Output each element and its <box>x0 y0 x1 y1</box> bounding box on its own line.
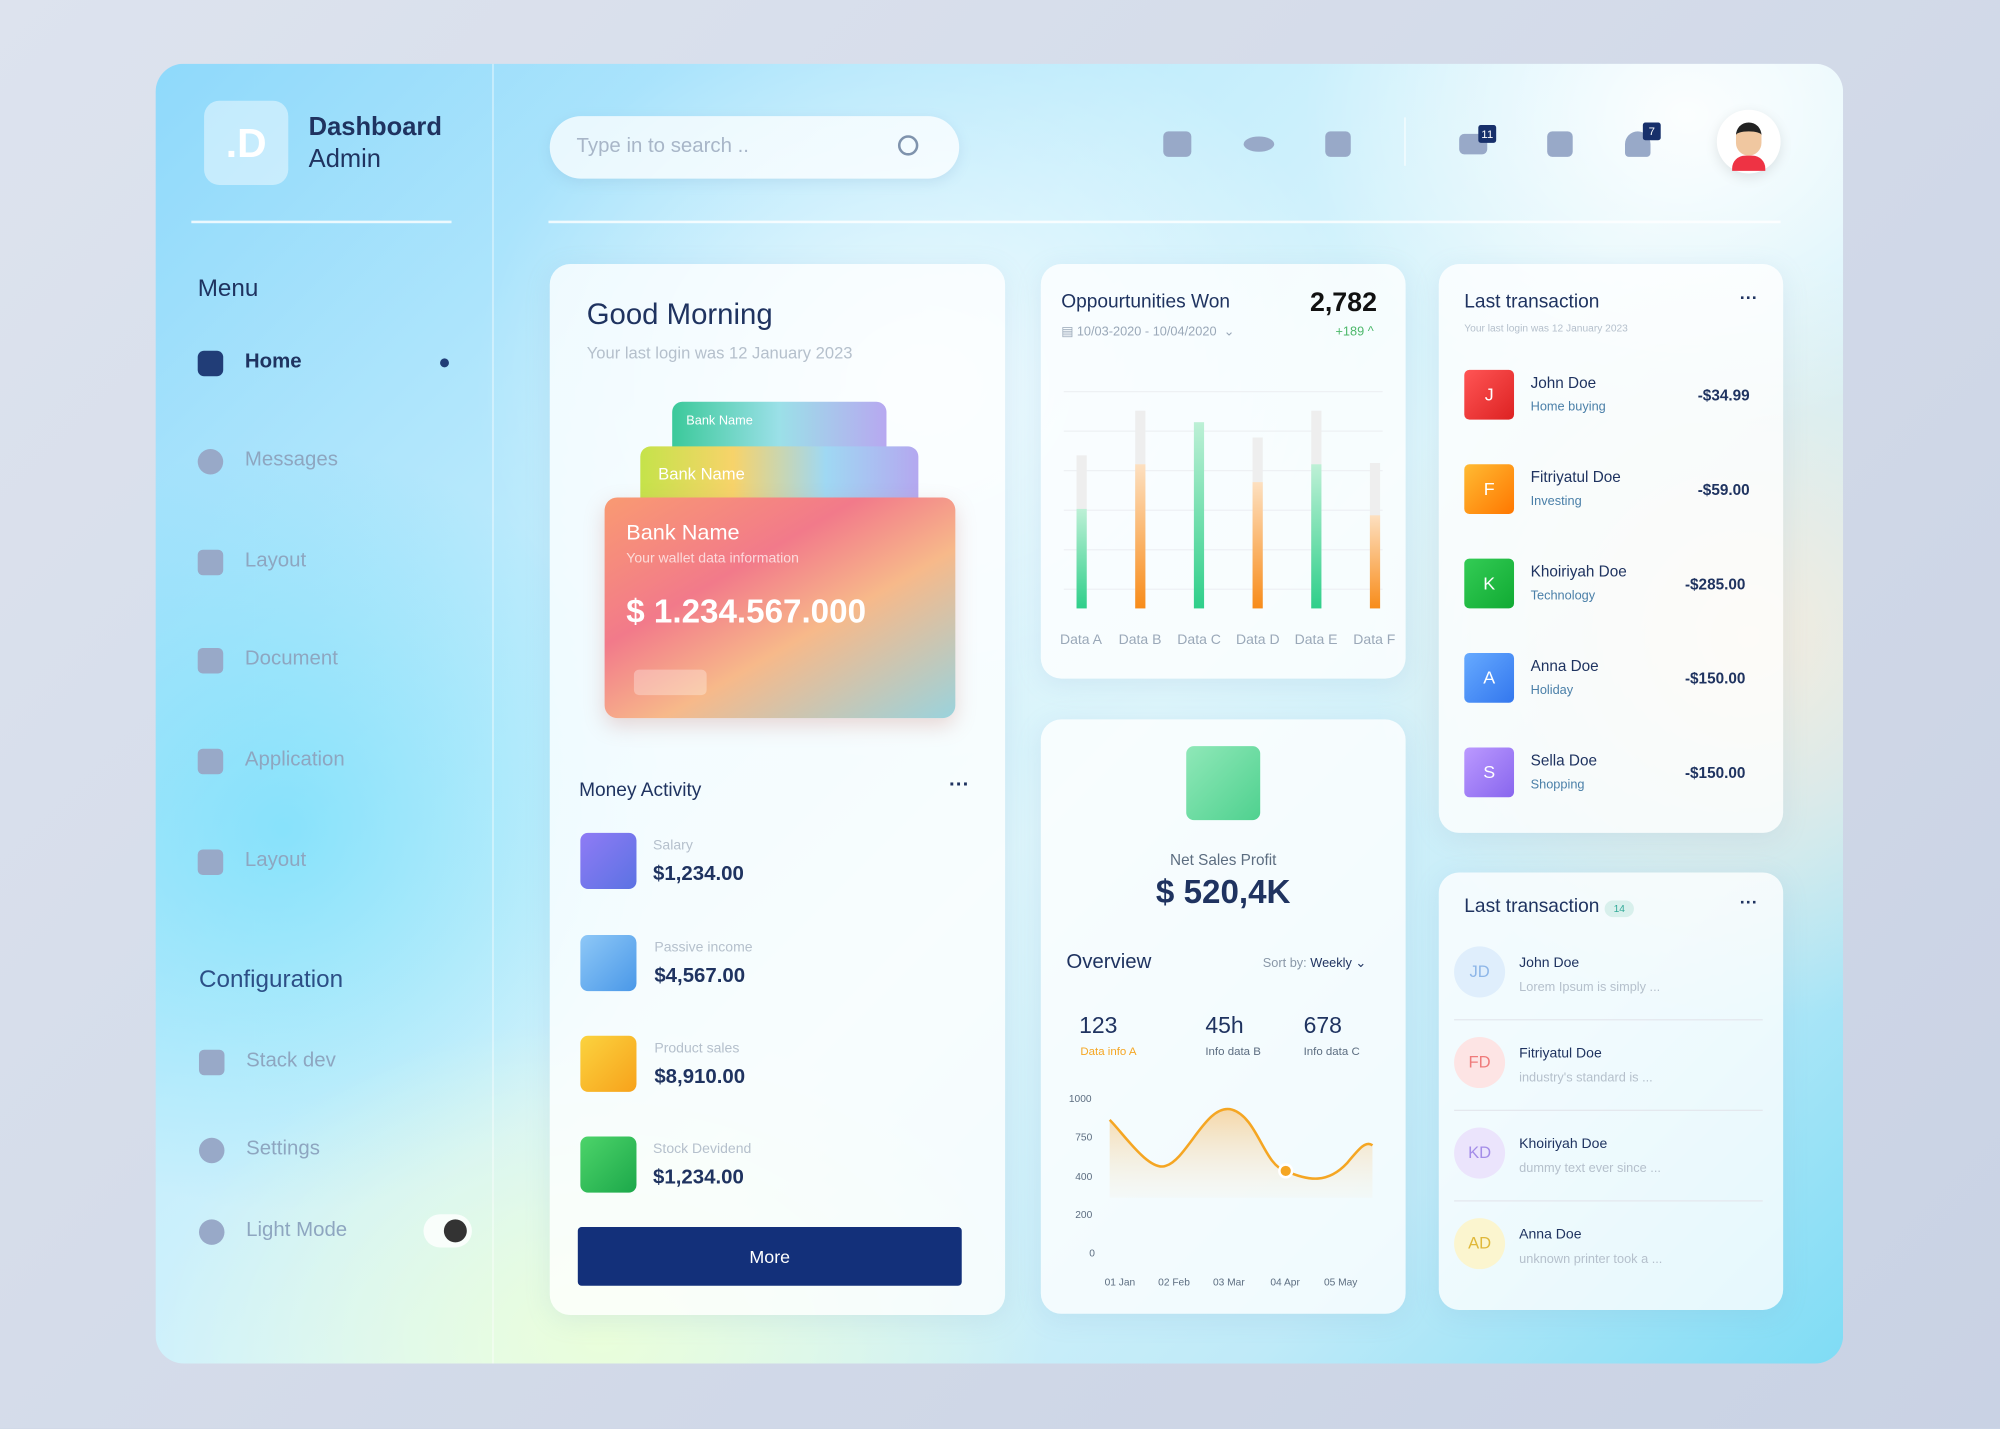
card: greeting & money activity: Product sales <box>654 1041 739 1056</box>
search box <box>550 116 959 179</box>
card: greeting & money activity: Good Morning <box>587 297 773 330</box>
card: greeting & money activity: $1,234.00 <box>653 1167 744 1189</box>
card: net sales & overview: Info data C <box>1304 1045 1360 1057</box>
card: net sales & overview: 01 Jan <box>1105 1278 1135 1289</box>
card: net sales & overview: 678 <box>1304 1013 1342 1038</box>
card: last transaction messages: Fitriyatul Doe <box>1519 1046 1602 1061</box>
card: opportunities bar chart: Data B <box>1119 631 1161 647</box>
brand name <box>308 114 442 173</box>
card: net sales & overview: 123 <box>1079 1013 1117 1038</box>
logo <box>204 101 288 185</box>
main panel <box>156 64 1843 1364</box>
card: last transaction messages: dummy text ever since ... <box>1519 1162 1661 1176</box>
card: opportunities bar chart <box>1041 264 1406 679</box>
sidebar menu: Configuration <box>199 967 343 994</box>
card: last transaction: S <box>1483 761 1495 782</box>
card: last transaction: -$285.00 <box>1685 575 1745 593</box>
bank cards <box>596 402 964 734</box>
more button <box>578 1227 962 1286</box>
card: opportunities bar chart: +189 ^ <box>1335 325 1374 339</box>
card: net sales & overview: Sort by: Weekly ⌄ <box>1263 957 1366 971</box>
sidebar menu: Light Mode <box>246 1219 347 1241</box>
card: last transaction messages: unknown printer took a ... <box>1519 1253 1662 1267</box>
card: last transaction messages: ··· <box>1740 892 1758 912</box>
avatar <box>1717 110 1781 173</box>
sidebar menu <box>198 276 472 1248</box>
card: last transaction: J <box>1485 384 1494 404</box>
bank cards: Bank Name <box>686 415 753 429</box>
card: last transaction <box>1439 264 1783 833</box>
card: greeting & money activity: Passive income <box>654 940 753 955</box>
card: last transaction: ··· <box>1740 287 1758 307</box>
card: net sales & overview: 750 <box>1075 1132 1093 1143</box>
money activity: Money Activity <box>579 779 701 801</box>
card: opportunities bar chart: ▤ 10/03-2020 - 10/04/2020 ⌄ <box>1061 325 1234 339</box>
card: last transaction: -$150.00 <box>1685 764 1745 782</box>
top icons: 11 <box>1481 128 1493 140</box>
card: greeting & money activity: $4,567.00 <box>654 966 745 987</box>
search box: Type in to search .. <box>577 135 749 157</box>
card: net sales & overview: 45h <box>1205 1013 1244 1038</box>
card: net sales & overview: 200 <box>1075 1210 1093 1221</box>
bank cards: Bank Name <box>658 464 745 483</box>
card: opportunities bar chart: Data A <box>1060 631 1103 647</box>
card: opportunities bar chart: Oppourtunities Won <box>1061 291 1230 312</box>
sidebar menu: Layout <box>245 550 306 571</box>
sidebar menu: Stack dev <box>246 1050 336 1071</box>
card: last transaction: -$59.00 <box>1698 481 1750 499</box>
card: net sales & overview: 400 <box>1075 1172 1093 1183</box>
card: net sales & overview: 05 May <box>1324 1278 1358 1289</box>
card: last transaction messages: John Doe <box>1519 955 1579 971</box>
card: last transaction messages: JD <box>1469 962 1490 981</box>
card: last transaction: Anna Doe <box>1531 657 1599 675</box>
card: last transaction messages: FD <box>1469 1052 1491 1071</box>
card: net sales & overview: Info data B <box>1205 1045 1261 1057</box>
logo: .D <box>226 120 267 166</box>
card: last transaction: Shopping <box>1531 778 1585 792</box>
card: greeting & money activity: Salary <box>653 838 693 853</box>
card: greeting & money activity: ··· <box>949 774 969 796</box>
card: last transaction: K <box>1483 573 1495 593</box>
bank cards: $ 1.234.567.000 <box>626 592 866 630</box>
card: last transaction: Technology <box>1531 589 1595 603</box>
brand name: Admin <box>309 145 381 173</box>
card: last transaction: -$34.99 <box>1698 386 1750 404</box>
sidebar menu: Application <box>245 749 345 770</box>
sidebar menu: Settings <box>246 1138 320 1159</box>
card: last transaction: John Doe <box>1531 374 1596 392</box>
card: last transaction messages: Khoiriyah Doe <box>1519 1136 1607 1152</box>
sidebar menu: Layout <box>245 849 306 871</box>
card: net sales & overview: 04 Apr <box>1270 1278 1300 1289</box>
card: greeting & money activity: $8,910.00 <box>654 1066 745 1088</box>
card: greeting & money activity: $1,234.00 <box>653 864 744 885</box>
card: net sales & overview: 03 Mar <box>1213 1278 1245 1289</box>
card: last transaction: Sella Doe <box>1531 751 1597 769</box>
sidebar menu: Messages <box>245 449 338 471</box>
card: opportunities bar chart: Data E <box>1295 631 1338 647</box>
card: opportunities bar chart: 2,782 <box>1310 288 1377 318</box>
card: last transaction: Fitriyatul Doe <box>1531 468 1621 486</box>
card: opportunities bar chart: Data C <box>1177 631 1221 647</box>
top icons <box>1163 117 1661 166</box>
sidebar menu: Document <box>245 648 338 670</box>
card: opportunities bar chart: Data D <box>1236 631 1280 647</box>
card: greeting & money activity <box>550 264 1005 1315</box>
card: last transaction: Home buying <box>1531 401 1606 415</box>
card: last transaction: Khoiriyah Doe <box>1531 562 1627 580</box>
card: net sales & overview <box>1041 719 1406 1314</box>
card: net sales & overview: Overview <box>1066 952 1151 973</box>
card: last transaction messages: AD <box>1468 1233 1491 1253</box>
card: greeting & money activity: Your last login was 12 January 2023 <box>587 343 853 362</box>
card: last transaction: A <box>1483 667 1495 687</box>
card: net sales & overview: Data info A <box>1080 1045 1137 1057</box>
card: last transaction: Holiday <box>1531 684 1573 698</box>
card: last transaction: -$150.00 <box>1685 670 1745 687</box>
card: last transaction: Investing <box>1531 495 1582 509</box>
card: greeting & money activity: Stock Devidend <box>653 1142 751 1157</box>
card: net sales & overview: $ 520,4K <box>1156 872 1291 911</box>
card: last transaction: Your last login was 12 January 2023 <box>1464 323 1628 334</box>
card: net sales & overview: 1000 <box>1069 1094 1092 1105</box>
brand name: Dashboard <box>309 114 442 142</box>
card: last transaction messages <box>1439 872 1783 1310</box>
more button: More <box>749 1246 790 1267</box>
card: last transaction messages: KD <box>1468 1143 1491 1162</box>
main panel: 7 <box>1649 125 1655 138</box>
card: last transaction messages: Last transaction 14 <box>1464 895 1625 917</box>
card: last transaction messages: industry's standard is ... <box>1519 1071 1653 1085</box>
card: last transaction messages: Lorem Ipsum is simply ... <box>1519 981 1660 995</box>
bank cards: Bank Name <box>626 520 740 545</box>
card: net sales & overview: Net Sales Profit <box>1170 851 1276 869</box>
bank cards: Your wallet data information <box>626 551 799 566</box>
sidebar menu: Menu <box>198 276 258 302</box>
card: net sales & overview: 0 <box>1089 1248 1095 1259</box>
card: last transaction messages: Anna Doe <box>1519 1227 1582 1242</box>
card: opportunities bar chart: Data F <box>1353 631 1395 647</box>
card: last transaction: Last transaction <box>1464 291 1599 312</box>
sidebar menu: Home <box>245 351 302 372</box>
card: net sales & overview: 02 Feb <box>1158 1278 1190 1289</box>
card: last transaction: F <box>1484 478 1495 499</box>
